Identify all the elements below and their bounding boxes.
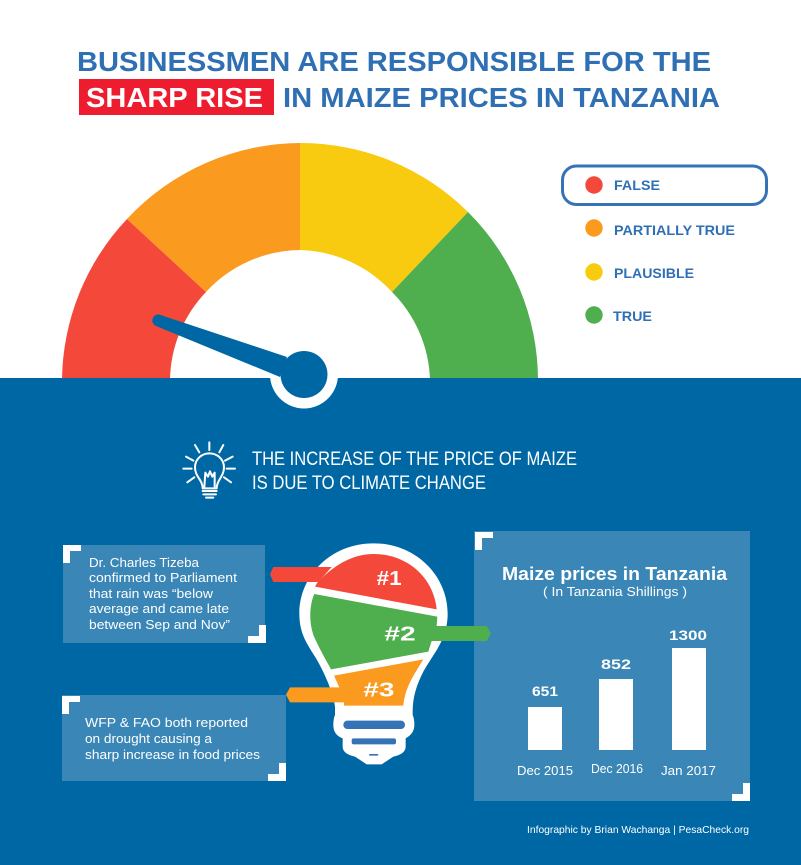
large light bulb	[270, 543, 491, 764]
bar chart: 651	[532, 683, 558, 699]
bar chart: Jan 2017	[661, 763, 716, 778]
legend: PLAUSIBLE	[614, 265, 694, 281]
panel: Tizeba callout: between Sep and Nov”	[89, 617, 230, 632]
bulb base bands	[343, 721, 405, 756]
segment 1	[270, 554, 437, 609]
chart title: ( In Tanzania Shillings )	[543, 584, 687, 599]
legend	[562, 166, 766, 324]
blue background panel	[0, 378, 801, 865]
gauge needle	[152, 314, 338, 408]
heading: THE INCREASE OF THE PRICE OF MAIZE	[252, 449, 577, 470]
bar chart: Dec 2016	[591, 761, 643, 776]
panel: WFP and FAO callout: on drought causing a	[85, 731, 213, 746]
segment 3	[286, 659, 423, 706]
segment 2: #2	[384, 623, 416, 646]
panel: Tizeba callout: Dr. Charles Tizeba	[89, 555, 200, 570]
bar chart: 1300	[669, 627, 707, 643]
legend: PARTIALLY TRUE	[614, 222, 735, 238]
chart title	[502, 564, 728, 599]
legend: FALSE	[614, 177, 660, 193]
heading	[252, 449, 577, 494]
title: BUSINESSMEN ARE RESPONSIBLE FOR THE	[77, 46, 711, 77]
heading: IS DUE TO CLIMATE CHANGE	[252, 473, 486, 494]
bar chart: 852	[601, 656, 631, 672]
bar chart	[517, 627, 716, 778]
panel: Tizeba callout	[63, 545, 266, 643]
segment 1: #1	[377, 567, 402, 590]
title: IN MAIZE PRICES IN TANZANIA	[283, 82, 720, 113]
bulb outline	[299, 543, 448, 764]
panel: Tizeba callout: that rain was “below	[89, 586, 214, 601]
panel: WFP and FAO callout	[62, 695, 286, 781]
panel: Tizeba callout: average and came late	[89, 601, 229, 616]
bar chart: Dec 2015	[517, 763, 573, 778]
gauge dial	[62, 143, 538, 380]
panel: maize prices chart	[474, 531, 750, 801]
panel: Tizeba callout: confirmed to Parliament	[89, 570, 237, 585]
title	[77, 46, 720, 115]
chart title: Maize prices in Tanzania	[502, 564, 728, 584]
credit line: Infographic by Brian Wachanga | PesaCheck.org	[527, 824, 749, 836]
panel: WFP and FAO callout: sharp increase in food prices	[85, 747, 261, 762]
title: SHARP RISE	[86, 82, 263, 113]
segment 2	[310, 594, 491, 669]
icon: small light bulb	[183, 442, 235, 498]
panel: WFP and FAO callout: WFP & FAO both reported	[85, 715, 248, 730]
segment 3: #3	[363, 679, 394, 702]
legend: TRUE	[613, 308, 652, 324]
